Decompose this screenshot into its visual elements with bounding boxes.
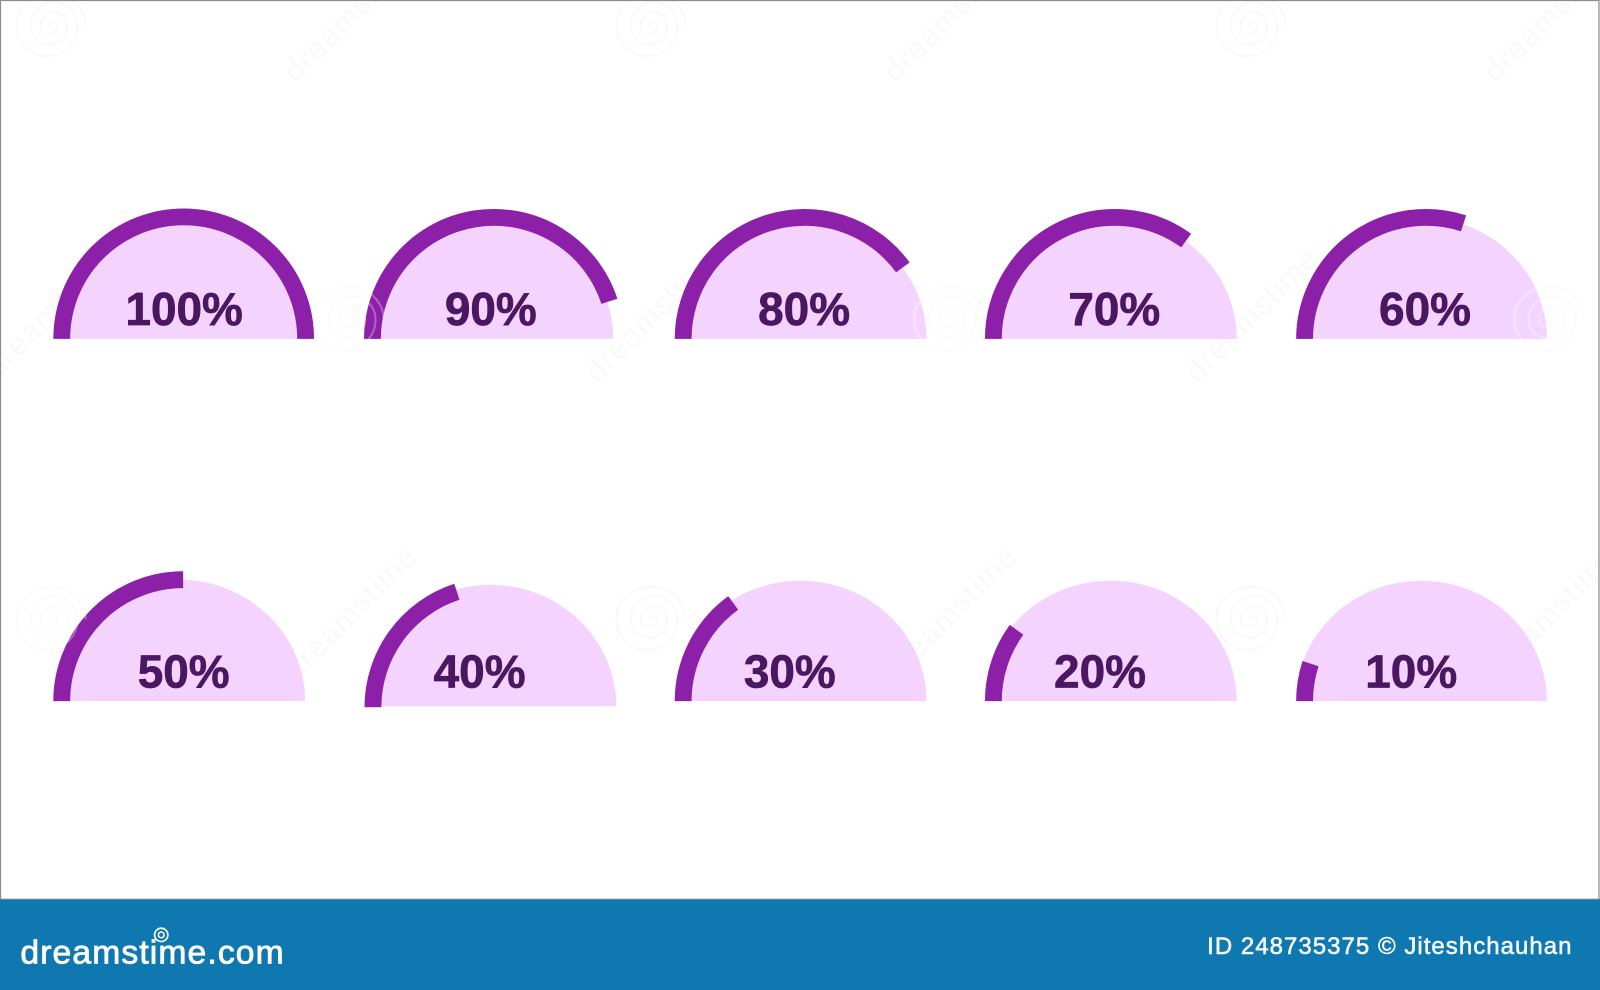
watermark spirals over gauges: [16, 287, 1584, 650]
watermark pattern: dreamstime: [277, 539, 425, 687]
gauge: 100%: 100%: [125, 283, 243, 335]
gauge: 80%: 80%: [758, 283, 850, 335]
gauge: 50%: [53, 580, 305, 701]
gauge: 10%: 10%: [1365, 645, 1457, 697]
watermark pattern: dreamstime: [1178, 241, 1326, 389]
gauge: 70%: 70%: [1068, 283, 1160, 335]
footer bar: [0, 899, 1600, 990]
gauge: 60%: [1296, 217, 1547, 339]
gauge: 40%: [364, 585, 616, 707]
icon: logo spiral: [155, 928, 168, 942]
gauge: 50%: 50%: [138, 645, 230, 697]
gauge: 100%: [61, 216, 306, 339]
gauge: 70%: [985, 217, 1237, 339]
watermark pattern: [0, 0, 1600, 687]
image id and author: ID 248735375 © Jiteshchauhan: [1207, 933, 1571, 960]
gauge: 90%: [364, 217, 613, 339]
gauge: 20%: 20%: [1054, 645, 1146, 697]
dreamstime logo text: dreamstime.com: [20, 934, 284, 971]
watermark pattern: dreamstime: [877, 539, 1025, 687]
gauge: 30%: 30%: [744, 645, 836, 697]
gauge: 20%: [985, 581, 1237, 701]
gauge: 40%: 40%: [434, 645, 526, 697]
gauge: 80%: [674, 217, 927, 339]
gauge: 60%: 60%: [1379, 283, 1471, 335]
gauge: 90%: 90%: [445, 283, 537, 335]
gauge: 30%: [674, 581, 927, 701]
gauge: 10%: [1296, 581, 1547, 701]
watermark pattern: dreamstime: [578, 241, 726, 389]
